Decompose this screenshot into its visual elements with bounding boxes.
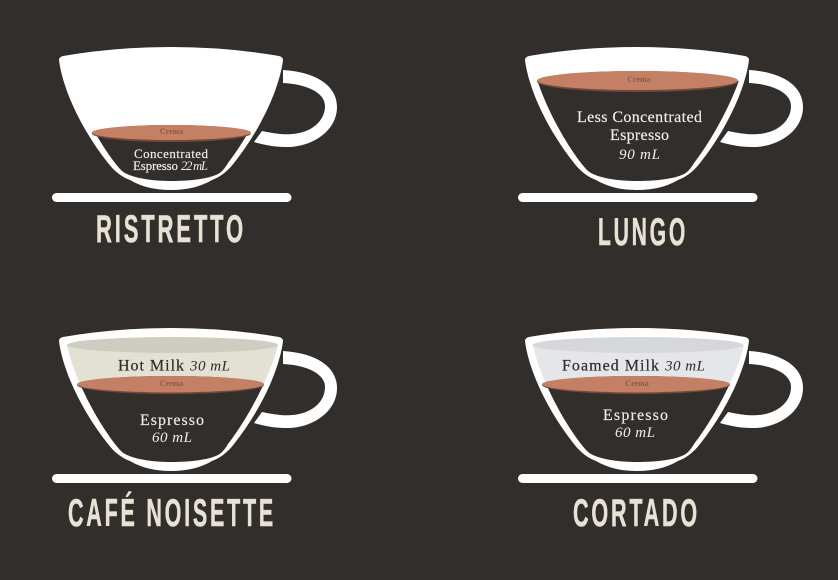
crema label: Crema: [160, 379, 183, 388]
milk surface: [67, 337, 278, 353]
espresso and foam fill: [533, 345, 744, 462]
cup: lungo: [516, 47, 803, 193]
espresso fill: [538, 81, 739, 181]
cup: cortado: [516, 328, 803, 475]
crema layer: [542, 376, 730, 394]
crema label: Crema: [625, 379, 649, 388]
cup handle: [254, 351, 337, 428]
cup: cafe noisette: [50, 328, 337, 475]
saucer: [518, 193, 758, 202]
crema layer: [537, 71, 738, 92]
foamed milk label: Foamed Milk: [562, 358, 659, 374]
espresso label: [603, 407, 668, 441]
saucer: [52, 474, 292, 483]
cup body: [59, 47, 283, 190]
foamed milk label: 30 mL: [664, 358, 705, 374]
foam surface: [532, 337, 744, 353]
espresso label: [133, 146, 208, 173]
title: lungo: LUNGO: [598, 211, 688, 254]
espresso label: Concentrated: [134, 146, 208, 161]
cup body: [525, 47, 749, 190]
cup: ristretto: [50, 47, 337, 193]
panel: cortado: [516, 328, 803, 535]
cup body: [59, 328, 283, 471]
espresso label: 60 mL: [615, 425, 655, 441]
crema label: Crema: [627, 75, 651, 84]
espresso and milk fill: [67, 346, 278, 462]
espresso label: Espresso: [140, 412, 204, 429]
hot milk label: 30 mL: [189, 358, 230, 374]
crema layer: [77, 376, 264, 394]
title: ristretto: RISTRETTO: [96, 208, 246, 251]
panel: lungo: [516, 47, 803, 254]
hot milk label: [118, 358, 230, 374]
espresso label: [577, 109, 702, 163]
cup handle: [720, 351, 803, 428]
espresso label: 90 mL: [619, 147, 660, 163]
espresso label: Espresso: [603, 407, 668, 424]
foamed milk label: [562, 358, 705, 374]
espresso label: Espresso: [133, 158, 178, 173]
espresso label: Less Concentrated: [577, 109, 702, 126]
espresso label: 22 mL: [181, 159, 208, 173]
hot milk label: Hot Milk: [118, 358, 184, 374]
cup handle: [254, 70, 337, 147]
espresso fill: [97, 136, 246, 181]
crema label: Crema: [160, 127, 183, 136]
title: cafe noisette: CAFÉ NOISETTE: [68, 491, 276, 535]
espresso label: [140, 412, 204, 446]
panel: cafe noisette: [50, 328, 337, 535]
cup body: [525, 328, 749, 471]
saucer: [52, 193, 292, 202]
espresso label: Espresso: [610, 127, 669, 144]
saucer: [518, 474, 758, 483]
cup handle: [720, 70, 803, 147]
espresso label: 60 mL: [152, 430, 192, 446]
crema layer: [92, 125, 251, 142]
panel: ristretto: [50, 47, 337, 251]
title: cortado: CORTADO: [573, 492, 700, 535]
